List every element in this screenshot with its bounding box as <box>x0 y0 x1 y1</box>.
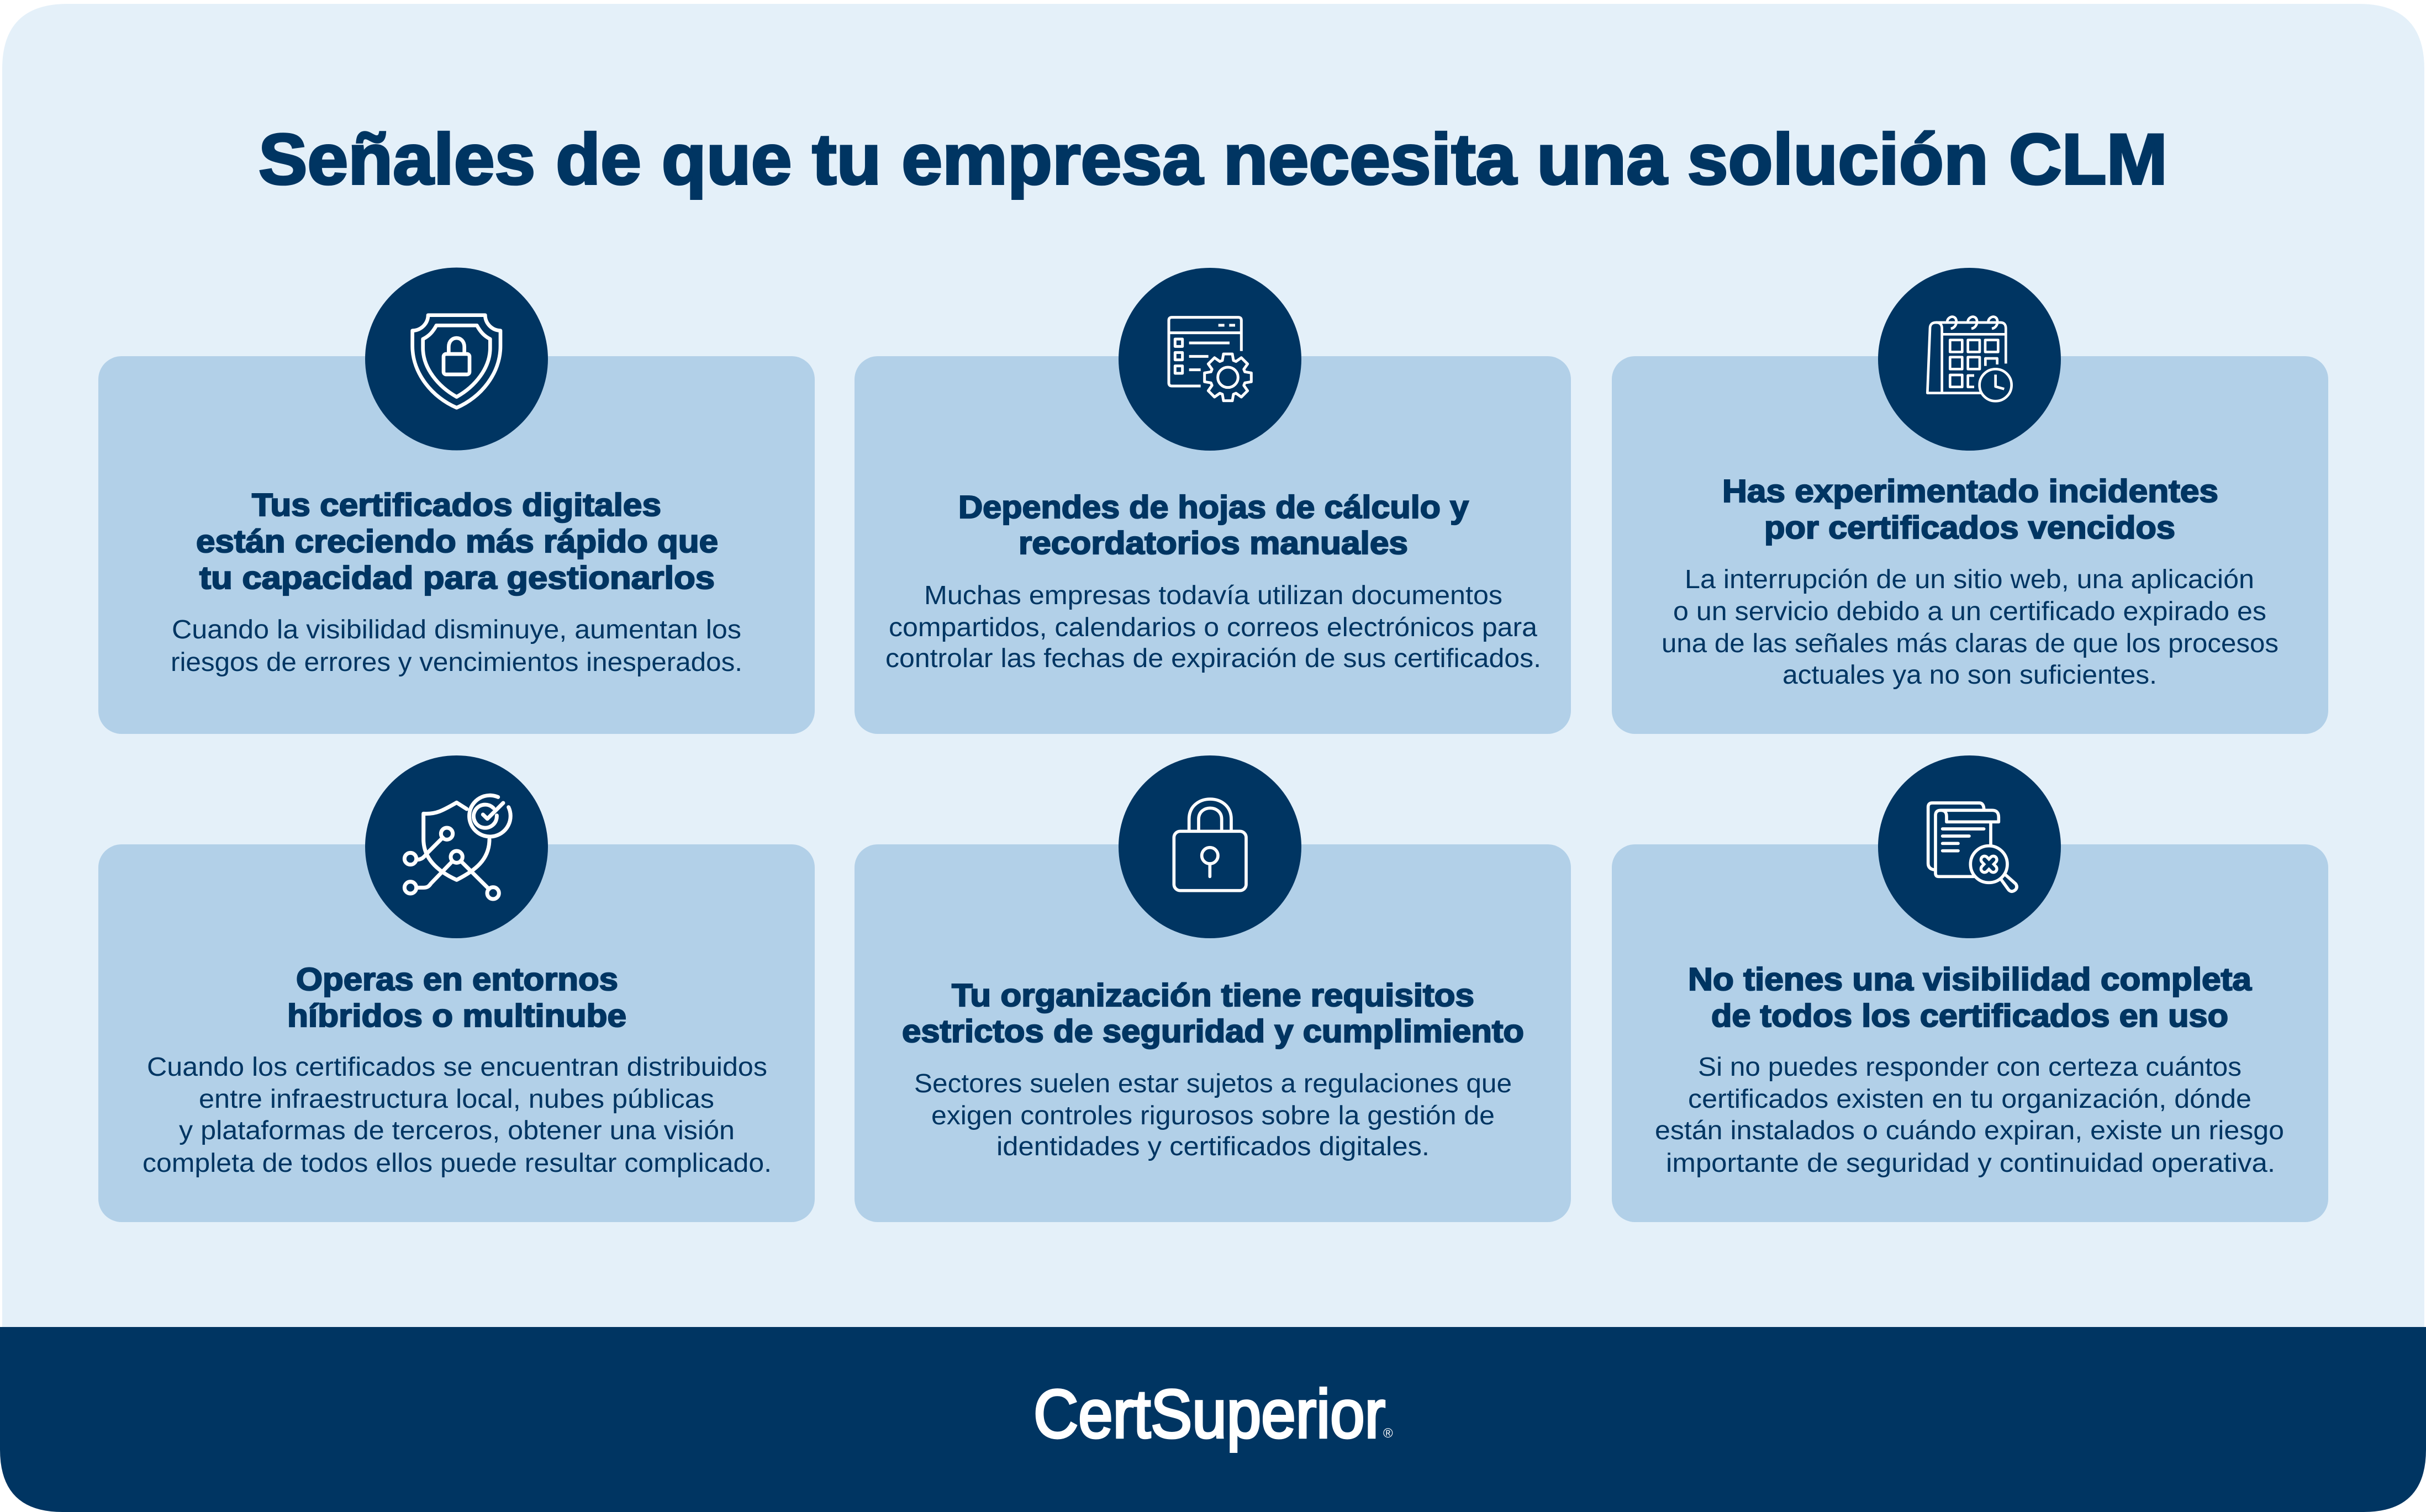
heading: hybrid multicloud <box>287 961 626 1034</box>
panel: compliance <box>855 755 1571 1222</box>
body text: compliance: identidades y certificados digitales. <box>996 1132 1430 1161</box>
title: Señales de que tu empresa necesita una solución CLM <box>259 119 2167 199</box>
icon: shield with lock <box>365 267 548 451</box>
body text: spreadsheets: controlar las fechas de expiración de sus certificados. <box>885 644 1541 673</box>
panel: visibility <box>1612 755 2328 1222</box>
body text: certificates growing: riesgos de errores y vencimientos inesperados. <box>171 648 742 677</box>
body text: hybrid multicloud <box>143 1053 772 1178</box>
body text: spreadsheets: compartidos, calendarios o correos electrónicos para <box>889 613 1537 642</box>
heading: expired incidents <box>1722 473 2218 546</box>
body text: expired incidents: La interrupción de un sitio web, una aplicación <box>1685 565 2254 594</box>
body text: hybrid multicloud: completa de todos ellos puede resultar complicado. <box>143 1149 772 1178</box>
icon: padlock <box>1119 755 1301 938</box>
heading: expired incidents: por certificados vencidos <box>1764 510 2175 546</box>
heading: certificates growing: tu capacidad para gestionarlos <box>199 560 715 596</box>
icon: documents with magnifier <box>1878 755 2061 938</box>
heading: visibility <box>1688 961 2252 1034</box>
body text: visibility: importante de seguridad y continuidad operativa. <box>1666 1149 2275 1178</box>
heading: visibility: de todos los certificados en uso <box>1711 998 2228 1034</box>
body text: spreadsheets: Muchas empresas todavía utilizan documentos <box>924 581 1502 610</box>
icon: calendar with clock <box>1878 268 2061 451</box>
heading: compliance: estrictos de seguridad y cumplimiento <box>902 1013 1524 1049</box>
panel: expired incidents <box>1612 268 2328 734</box>
body text: spreadsheets <box>885 581 1541 673</box>
heading: certificates growing <box>196 487 718 596</box>
heading: hybrid multicloud: híbridos o multinube <box>287 998 626 1034</box>
icon: shield network with check <box>365 755 548 938</box>
heading: spreadsheets: Dependes de hojas de cálculo y <box>958 489 1469 525</box>
heading: spreadsheets: recordatorios manuales <box>1019 525 1408 561</box>
logo: CertSuperior: CertSuperior <box>1033 1376 1385 1452</box>
body text: certificates growing <box>171 615 742 677</box>
body text: visibility: están instalados o cuándo expiran, existe un riesgo <box>1655 1116 2284 1145</box>
body text: hybrid multicloud: y plataformas de terceros, obtener una visión <box>179 1116 735 1145</box>
body text: expired incidents: una de las señales más claras de que los procesos <box>1662 629 2279 658</box>
body text: expired incidents: o un servicio debido a un certificado expirado es <box>1673 597 2266 626</box>
heading: compliance <box>902 977 1524 1049</box>
body text: hybrid multicloud: entre infraestructura local, nubes públicas <box>199 1085 714 1114</box>
body text: expired incidents <box>1662 565 2279 690</box>
body text: certificates growing: Cuando la visibilidad disminuye, aumentan los <box>172 615 741 644</box>
logo: CertSuperior: ® <box>1383 1426 1393 1441</box>
body text: expired incidents: actuales ya no son suficientes. <box>1782 660 2157 690</box>
heading: hybrid multicloud: Operas en entornos <box>296 961 618 997</box>
heading: certificates growing: están creciendo más rápido que <box>196 524 718 559</box>
footer band <box>0 1327 2426 1512</box>
panel: certificates growing <box>98 267 815 734</box>
body text: visibility <box>1655 1053 2284 1178</box>
panel: hybrid multicloud <box>98 755 815 1222</box>
body text: compliance: Sectores suelen estar sujetos a regulaciones que <box>914 1069 1512 1098</box>
heading: spreadsheets <box>958 489 1469 561</box>
heading: certificates growing: Tus certificados digitales <box>252 487 661 523</box>
panel: spreadsheets <box>855 268 1571 734</box>
body text: hybrid multicloud: Cuando los certificados se encuentran distribuidos <box>147 1053 767 1082</box>
body text: compliance: exigen controles rigurosos sobre la gestión de <box>931 1101 1495 1130</box>
heading: visibility: No tienes una visibilidad completa <box>1688 961 2252 997</box>
heading: compliance: Tu organización tiene requisitos <box>952 977 1474 1013</box>
body text: compliance <box>914 1069 1512 1161</box>
heading: expired incidents: Has experimentado incidentes <box>1722 473 2218 509</box>
icon: checklist window with gear <box>1119 268 1301 451</box>
body text: visibility: certificados existen en tu organización, dónde <box>1688 1085 2251 1114</box>
body text: visibility: Si no puedes responder con certeza cuántos <box>1698 1053 2242 1082</box>
